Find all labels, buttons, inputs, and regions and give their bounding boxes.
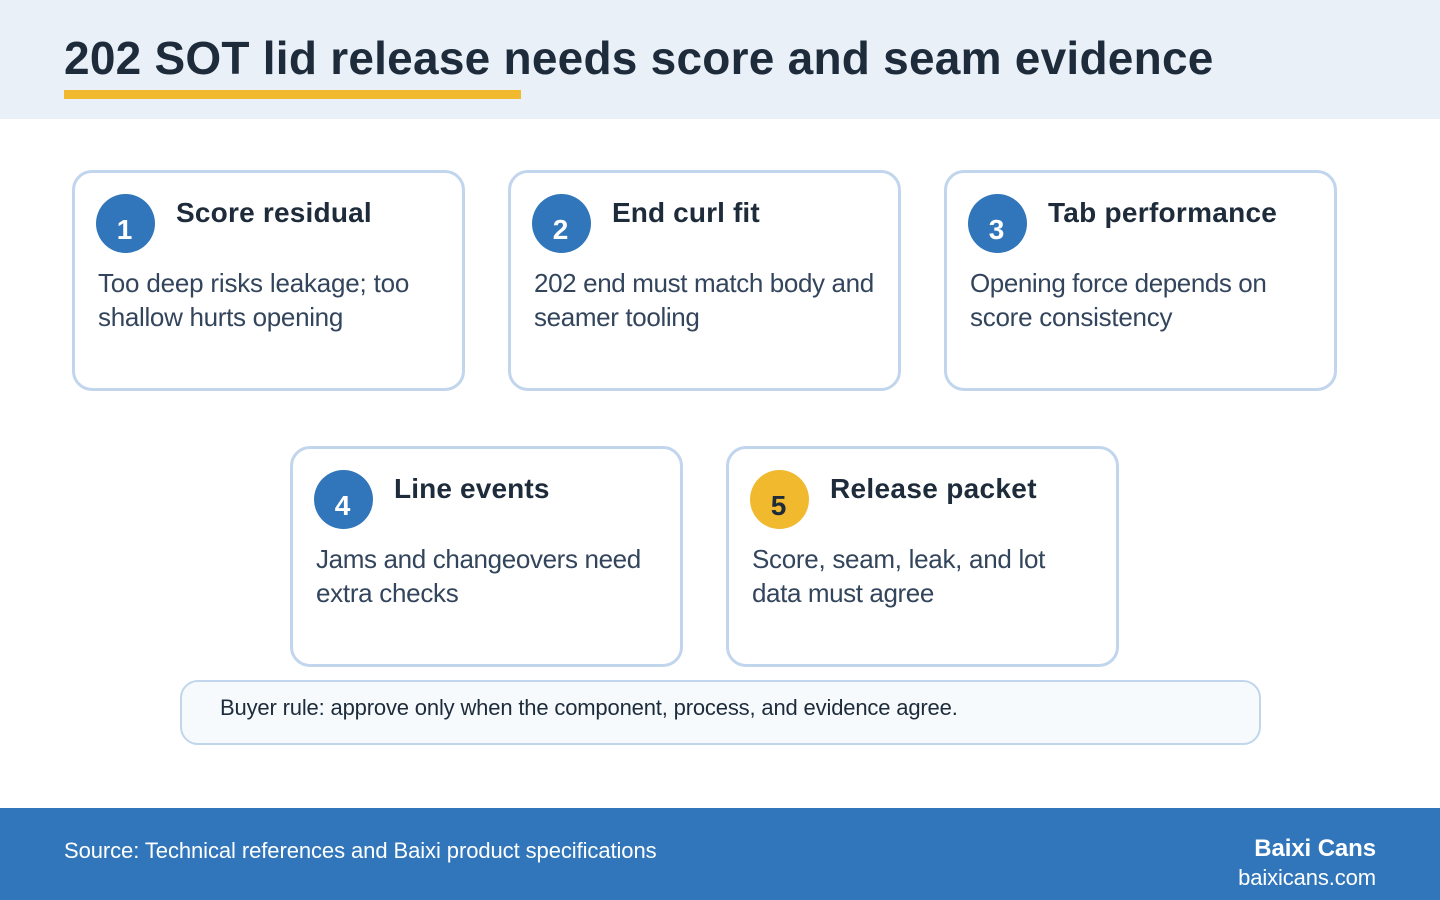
heading: release packet: Release packet xyxy=(830,473,1037,504)
badge 5 xyxy=(750,470,809,529)
badge 3 xyxy=(968,194,1027,253)
text: end curl fit: seamer tooling xyxy=(534,302,700,332)
heading: end curl fit: End curl fit xyxy=(612,197,760,228)
heading: line events: Line events xyxy=(394,473,550,504)
text: release packet xyxy=(752,544,1046,608)
badge 1 xyxy=(96,194,155,253)
title underline xyxy=(64,90,521,99)
text: release packet: Score, seam, leak, and lot xyxy=(752,544,1045,574)
panel: score residual xyxy=(72,170,465,391)
panel: tab performance xyxy=(944,170,1337,391)
badge 4: 4 xyxy=(335,490,350,521)
text: release packet: data must agree xyxy=(752,578,934,608)
badge 2 xyxy=(532,194,591,253)
badge 3: 3 xyxy=(989,214,1004,245)
text: tab performance xyxy=(970,268,1266,332)
text: end curl fit: 202 end must match body and xyxy=(534,268,874,298)
title: 202 SOT lid release needs score and seam evidence xyxy=(64,32,1214,84)
callout: buyer rule xyxy=(180,680,1261,745)
text: end curl fit xyxy=(534,268,874,332)
panel: end curl fit xyxy=(508,170,901,391)
badge 2: 2 xyxy=(553,214,568,245)
panel: release packet xyxy=(726,446,1119,667)
text: line events: Jams and changeovers need xyxy=(316,544,641,574)
brand url: baixicans.com xyxy=(1238,865,1376,890)
badge 4 xyxy=(314,470,373,529)
text: tab performance: score consistency xyxy=(970,302,1172,332)
text: tab performance: Opening force depends on xyxy=(970,268,1266,298)
callout: buyer rule: Buyer rule: approve only when the component, process, and evidence agree. xyxy=(220,695,958,720)
badge 5: 5 xyxy=(771,490,786,521)
heading: tab performance: Tab performance xyxy=(1048,197,1277,228)
panel: line events xyxy=(290,446,683,667)
footer band xyxy=(0,808,1440,900)
text: score residual: shallow hurts opening xyxy=(98,302,343,332)
badge 1: 1 xyxy=(117,214,132,245)
text: score residual: Too deep risks leakage; too xyxy=(98,268,409,298)
brand name: Baixi Cans xyxy=(1254,835,1376,862)
text: score residual xyxy=(98,268,409,332)
text: line events xyxy=(316,544,641,608)
source note: Source: Technical references and Baixi product specifications xyxy=(64,838,657,863)
header band xyxy=(0,0,1440,119)
heading: score residual: Score residual xyxy=(176,197,372,228)
text: line events: extra checks xyxy=(316,578,458,608)
